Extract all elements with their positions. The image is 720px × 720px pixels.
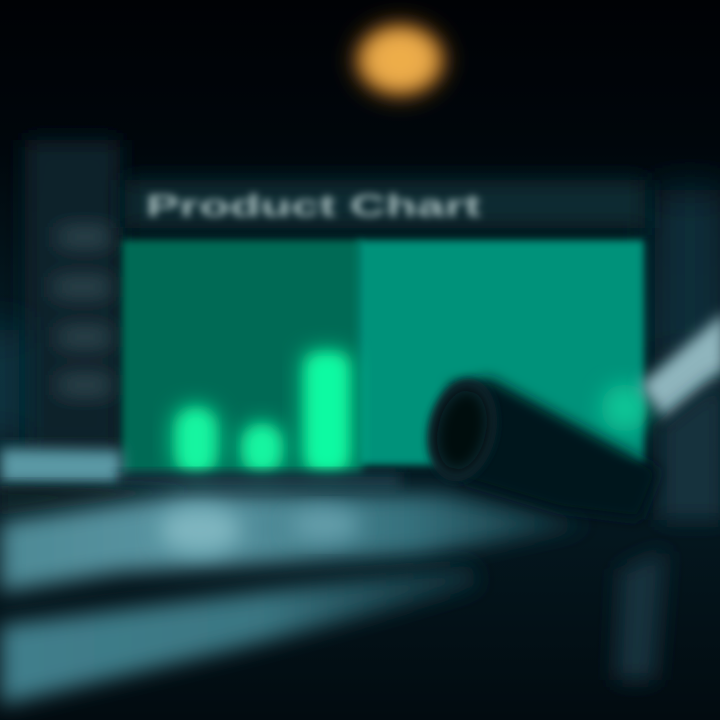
chart panel: [122, 240, 644, 475]
right side haze: [655, 190, 720, 360]
panel: left dark green: [122, 240, 362, 475]
left edge glow: [0, 330, 20, 440]
glowing orange orb: [352, 20, 448, 100]
shelf surfaces: [0, 448, 590, 705]
panel: right bright green: [358, 240, 644, 465]
bar chart: [172, 350, 352, 475]
green glow lower right: [601, 384, 649, 432]
icon: dark telescope cylinder: [418, 372, 660, 520]
chart title: [125, 180, 645, 228]
right arm highlight: [640, 312, 720, 420]
chart title: Product Chart: [146, 188, 481, 223]
left dark panel with faint axis labels: [25, 140, 120, 450]
